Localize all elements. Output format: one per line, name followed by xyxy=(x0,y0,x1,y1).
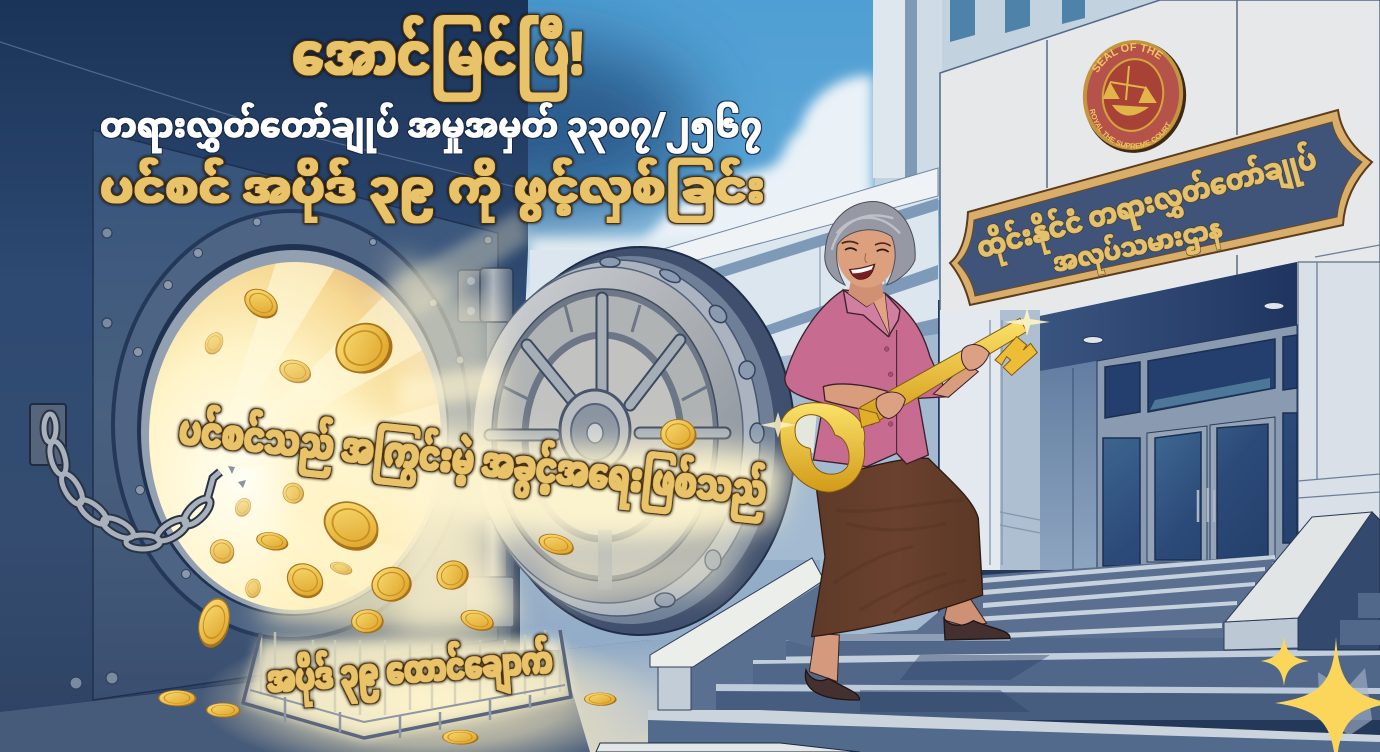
title: success headline: အောင်မြင်ပြီ! xyxy=(292,0,584,124)
vault wall xyxy=(0,0,528,712)
vault frame ring xyxy=(111,209,471,641)
court seal xyxy=(1082,40,1186,153)
lit floor around trap xyxy=(200,625,660,752)
ring bolts xyxy=(134,218,464,578)
door locking lugs xyxy=(600,257,764,607)
head and hair xyxy=(825,202,915,307)
door segments xyxy=(500,305,710,400)
floor right of trap xyxy=(560,640,780,752)
stairs xyxy=(596,555,1380,752)
vault door xyxy=(473,247,795,635)
court building facade xyxy=(940,0,1380,570)
title block xyxy=(100,0,765,239)
skirt xyxy=(812,458,983,637)
hinges xyxy=(458,268,514,627)
background: cloud xyxy=(530,76,875,278)
subtitle: court case number: တရားလွှတ်တော်ချုပ် အမှုအမှတ် ၃၃၀၇/၂၅၆၇ xyxy=(100,93,762,167)
vault wall panel xyxy=(0,42,528,700)
spike trap xyxy=(243,630,571,738)
side windows xyxy=(1103,413,1297,566)
scales emblem xyxy=(1104,66,1155,115)
background: sky xyxy=(500,0,960,300)
right stair railing xyxy=(1224,512,1380,650)
door wheel spokes xyxy=(490,298,725,435)
light rays inside vault xyxy=(228,262,440,592)
entrance canopy and doors xyxy=(1040,262,1297,570)
building: left wing with banded wall xyxy=(520,168,938,650)
wall chain anchor xyxy=(30,404,246,549)
transom windows xyxy=(1105,335,1297,418)
broken chain xyxy=(44,414,220,549)
blouse xyxy=(785,288,978,467)
court name sign xyxy=(950,110,1372,305)
golden key xyxy=(780,318,1037,492)
woman shadow on steps xyxy=(860,655,1050,712)
light seen through bow hole xyxy=(795,414,817,453)
subtitle: article 39: ပင်စင် အပိုဒ် ၃၉ ကို ဖွင့်လှစ်ခြင်း xyxy=(100,145,765,239)
floor xyxy=(0,640,780,752)
coins xyxy=(159,284,697,745)
panel bolts xyxy=(70,228,492,689)
sparkle stars xyxy=(1261,636,1380,752)
legs and shoes xyxy=(805,598,1010,700)
woman holding golden key xyxy=(780,202,1037,700)
sign text: အလုပ်သမားဌာန xyxy=(1048,204,1228,294)
trap label: အပိုဒ် ၃၉ ထောင်ချောက် xyxy=(265,623,556,724)
banner text across light stream: ပင်စင်သည် အကြွင်းမဲ့ အခွင့်အရေးဖြစ်သည် xyxy=(174,391,770,539)
background: dark vignette behind title xyxy=(360,40,700,210)
glass double doors xyxy=(1147,426,1207,562)
seal text top: SEAL OF THE xyxy=(1092,43,1164,72)
door inner ring xyxy=(525,335,681,539)
sign text: ထိုင်းနိုင်ငံ တရားလွှတ်တော်ချုပ် xyxy=(970,131,1325,282)
golden light stream xyxy=(260,210,790,640)
building: upper tower and column xyxy=(873,0,1380,200)
left stair railing xyxy=(650,558,824,710)
key glints xyxy=(760,308,1050,438)
seal text bottom: ROYAL THE SUPREME COURT xyxy=(1090,108,1170,148)
